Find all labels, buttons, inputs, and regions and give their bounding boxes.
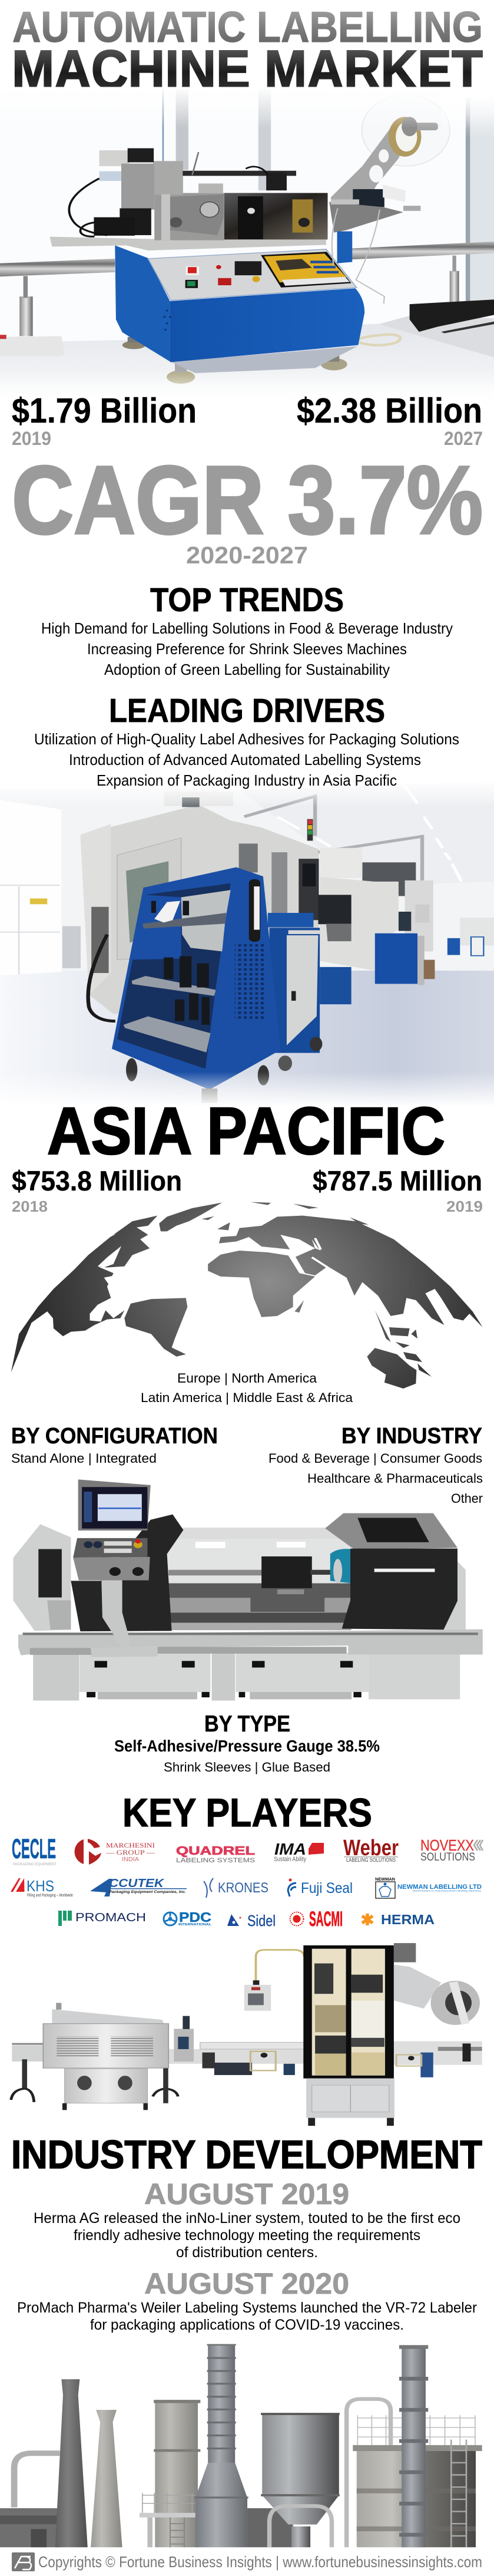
shrink sleeve labelling line image xyxy=(11,1943,482,2126)
world map globe xyxy=(11,1202,483,1388)
left building xyxy=(0,2453,60,2547)
heading: BY CONFIGURATION xyxy=(11,1424,218,1449)
logo: Novexx Solutions: NOVEXX xyxy=(420,1836,474,1854)
list of trends xyxy=(41,619,453,678)
logo: Sidel: Sidel xyxy=(247,1912,276,1929)
greenland xyxy=(159,1202,222,1231)
blue trolley xyxy=(112,867,280,1103)
CNC lathe machine image xyxy=(13,1479,483,1700)
footer xyxy=(12,2552,482,2571)
other regions list: Latin America | Middle East & Africa xyxy=(141,1390,353,1405)
date: AUGUST 2019 xyxy=(144,2178,349,2211)
other regions list xyxy=(141,1371,353,1405)
logo: Marchesini Group: INDIA xyxy=(122,1856,139,1863)
base cabinets xyxy=(18,1629,483,1700)
CAGR xyxy=(12,446,483,569)
date: AUGUST 2020 xyxy=(144,2267,349,2300)
eurasia xyxy=(219,1216,483,1327)
panel: top trends xyxy=(41,581,453,678)
logo: IMA xyxy=(274,1840,324,1863)
label roll xyxy=(394,1943,480,2025)
logo: Accutek: CCUTEK xyxy=(109,1877,165,1890)
logo: Newman Labelling xyxy=(375,1878,482,1898)
title xyxy=(12,4,483,100)
south america xyxy=(124,1298,187,1357)
tool cabinet xyxy=(268,913,322,1071)
shrink oven xyxy=(11,2003,194,2110)
heading: key players: KEY PLAYERS xyxy=(122,1790,372,1835)
stat: Asia Pacific 2019 xyxy=(313,1165,483,1215)
segment: by type xyxy=(114,1711,380,1774)
description: ProMach Pharma's Weiler Labeling Systems launched the VR-72 Labeler xyxy=(17,2300,477,2316)
logo: Fuji Seal: Fuji Seal xyxy=(301,1880,353,1896)
right housing xyxy=(325,1513,466,1630)
logo: Marchesini Group: MARCHESINI xyxy=(106,1842,155,1849)
logo: Sidel xyxy=(227,1912,276,1929)
logo: Sacmi xyxy=(290,1908,343,1931)
logo: Novexx Solutions: SOLUTIONS xyxy=(420,1851,475,1863)
logo: KHS xyxy=(11,1877,73,1898)
description: Herma AG released the inNo-Liner system, touted to be the first eco xyxy=(34,2210,460,2227)
list of trends: High Demand for Labelling Solutions in Food & Beverage Industry xyxy=(41,619,453,637)
logo: Krones: KRONES xyxy=(218,1880,268,1896)
heading: BY TYPE xyxy=(204,1711,290,1737)
list of trends: Increasing Preference for Shrink Sleeves Machines xyxy=(87,640,407,658)
logo: Weber: LABELING SOLUTIONS xyxy=(346,1857,396,1863)
logo: Marchesini Group xyxy=(75,1839,155,1865)
logo: Fuji Seal xyxy=(288,1879,353,1896)
year: 2018 xyxy=(12,1198,48,1215)
logo: Newman Labelling: NEWMAN xyxy=(375,1878,395,1882)
hopper silo xyxy=(247,2413,340,2547)
regional heading: Asia Pacific: ASIA PACIFIC xyxy=(47,1094,445,1168)
lathe interior xyxy=(165,1528,352,1630)
heading: BY INDUSTRY xyxy=(342,1424,482,1449)
logo: Quadrel: QUADREL xyxy=(176,1845,255,1858)
items: Other xyxy=(451,1491,483,1506)
value: $1.79 Billion xyxy=(12,391,197,430)
label reel and arm xyxy=(329,94,450,304)
logo: CECLE xyxy=(12,1833,57,1866)
other types: Shrink Sleeves | Glue Based xyxy=(164,1760,330,1774)
items xyxy=(268,1451,483,1506)
logo: Quadrel xyxy=(176,1845,255,1864)
control console xyxy=(73,1479,158,1657)
segment: by industry xyxy=(268,1424,483,1506)
tall ringed stack xyxy=(195,2344,248,2547)
chimneys xyxy=(55,2379,122,2547)
right tank with railing and pipes xyxy=(347,2345,482,2547)
british isles xyxy=(217,1222,230,1231)
logo: KHS: KHS xyxy=(26,1877,54,1895)
logo: IMA: Sustain Ability xyxy=(274,1856,306,1863)
logo: Marchesini Group: — GROUP — xyxy=(105,1849,155,1856)
leading type: Self-Adhesive/Pressure Gauge 38.5% xyxy=(114,1737,380,1755)
cutting head assembly xyxy=(50,149,328,250)
description xyxy=(17,2300,477,2333)
logo: Novexx Solutions xyxy=(420,1836,483,1863)
logo: Weber: Weber xyxy=(343,1836,399,1861)
africa xyxy=(208,1251,315,1317)
items: Healthcare & Pharmaceuticals xyxy=(307,1471,483,1486)
logo: PDC International: INTERNATIONAL xyxy=(178,1923,212,1927)
logo: ProMach: PROMACH xyxy=(75,1911,146,1924)
development: August 2019 xyxy=(34,2178,460,2261)
heading: TOP TRENDS xyxy=(150,581,344,619)
logo: Accutek xyxy=(90,1877,187,1896)
HMI panel and arm xyxy=(244,1950,304,2011)
logo: Accutek: Packaging Equipment Companies, Inc. xyxy=(109,1890,186,1894)
description: friendly adhesive technology meeting the requirements xyxy=(74,2227,420,2244)
logo: PDC International xyxy=(164,1909,212,1927)
north america xyxy=(11,1225,150,1373)
logo: PDC International: PDC xyxy=(179,1909,211,1925)
blue machine body xyxy=(115,245,364,362)
hero image: label cutting machine xyxy=(0,87,494,401)
stat: 2019 market size xyxy=(12,391,197,449)
heading: LEADING DRIVERS xyxy=(109,692,385,730)
main CNC enclosure xyxy=(80,791,422,1021)
cylinder tank with platform xyxy=(140,2400,200,2547)
logo: Herma: HERMA xyxy=(381,1912,435,1927)
description xyxy=(34,2210,460,2261)
logo: Quadrel: LABELING SYSTEMS xyxy=(176,1857,255,1864)
left column xyxy=(71,1515,183,1631)
value: $2.38 Billion xyxy=(297,391,482,430)
value: $787.5 Million xyxy=(313,1165,482,1196)
panel: leading drivers xyxy=(34,692,459,789)
icon: Fortune Business Insights logo xyxy=(12,2552,35,2571)
list of trends: Adoption of Green Labelling for Sustainability xyxy=(104,661,390,678)
logo: IMA: IMA xyxy=(274,1840,306,1858)
logo: Newman Labelling: World leaders in Pharmaceutical Labelling Machines xyxy=(413,1889,481,1892)
control panel xyxy=(148,249,357,301)
logo: Herma xyxy=(362,1912,435,1927)
value: $753.8 Million xyxy=(12,1165,182,1196)
logo: CECLE: PACKAGING EQUIPMENT xyxy=(13,1863,57,1866)
description: for packaging applications of COVID-19 vaccines. xyxy=(90,2317,404,2333)
segment: by configuration xyxy=(11,1424,218,1466)
development: August 2020 xyxy=(17,2267,477,2333)
list of drivers: Introduction of Advanced Automated Labelling Systems xyxy=(69,751,421,768)
list of drivers xyxy=(34,730,459,789)
factory photo with blue tool trolley xyxy=(0,780,494,1107)
other regions list: Europe | North America xyxy=(177,1371,317,1386)
indonesia xyxy=(375,1310,432,1377)
list of drivers: Expansion of Packaging Industry in Asia Pacific xyxy=(97,771,397,789)
stat: Asia Pacific 2018 xyxy=(12,1165,182,1215)
items: Stand Alone | Integrated xyxy=(11,1451,157,1466)
text: CECLE xyxy=(12,1833,56,1864)
labeller tower xyxy=(303,1945,394,2126)
list of drivers: Utilization of High-Quality Label Adhesives for Packaging Solutions xyxy=(34,730,459,748)
logo: Krones xyxy=(204,1878,268,1898)
logo: Newman Labelling: NEWMAN LABELLING LTD xyxy=(397,1884,482,1891)
logo: Sacmi: SACMI xyxy=(309,1908,343,1931)
industrial plant illustration xyxy=(0,2344,482,2547)
arctic islands xyxy=(114,1202,369,1235)
left door xyxy=(13,1524,71,1631)
stat: 2027 market size xyxy=(297,391,483,449)
items: Food & Beverage | Consumer Goods xyxy=(268,1451,482,1466)
logo: KHS: Filling and Packaging – Worldwide xyxy=(27,1892,73,1898)
description: of distribution centers. xyxy=(176,2244,318,2261)
CAGR period: 2020-2027 xyxy=(186,542,308,569)
australia xyxy=(367,1348,416,1388)
year: 2019 xyxy=(446,1198,483,1215)
year: 2027 xyxy=(444,428,483,449)
logo: ProMach xyxy=(58,1911,146,1926)
year: 2019 xyxy=(12,428,51,449)
conveyor xyxy=(12,2041,482,2077)
background machines xyxy=(277,784,494,1004)
madagascar xyxy=(294,1300,304,1312)
